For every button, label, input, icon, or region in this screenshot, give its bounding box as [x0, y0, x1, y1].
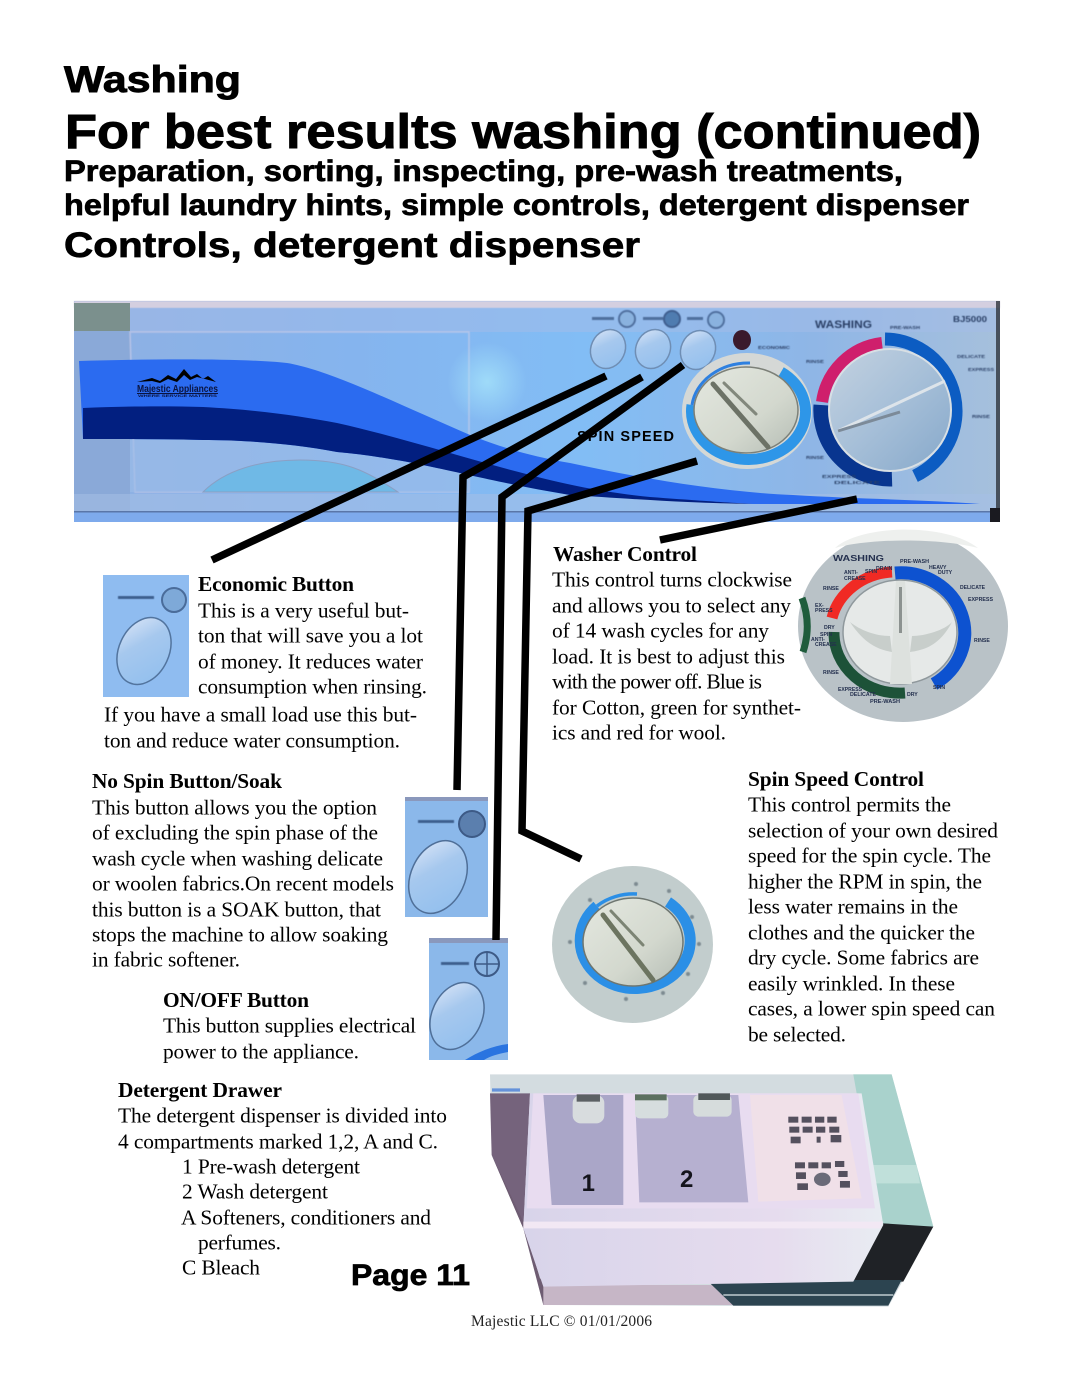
text: washer control: with the power off. Blue is [552, 670, 762, 694]
text: washer control: and allows you to select any [552, 594, 791, 618]
text: washer control [552, 542, 801, 745]
panel labels: RINSE [972, 414, 990, 419]
leader lines [212, 365, 857, 940]
photo: washing programme dial: HEAVY [929, 565, 947, 571]
text: detergent drawer: 4 compartments marked 1,2, A and C. [118, 1130, 438, 1154]
drawer body [523, 1093, 883, 1287]
logo: Majestic Appliances: Majestic Appliances [137, 383, 218, 395]
text: no spin button: in fabric softener. [92, 948, 240, 972]
photo: washing programme dial: ANTI- [844, 570, 858, 576]
photo: washing programme dial: EX- [815, 603, 824, 609]
logo: Majestic Appliances: WHERE SERVICE MATTERS [138, 393, 217, 398]
main heading: For best results washing (continued) [65, 106, 981, 159]
compartment 1 [543, 1095, 623, 1205]
photo: washing programme dial [798, 530, 1008, 722]
text: detergent drawer: Detergent Drawer [118, 1078, 282, 1102]
text: spin speed control: easily wrinkled. In these [748, 972, 955, 996]
thumbnail: no spin button [397, 797, 488, 923]
footer copyright: Majestic LLC © 01/01/2006 [471, 1313, 652, 1330]
panel labels [758, 314, 994, 485]
panel labels: DELICATE [834, 480, 880, 485]
compartment cap tops [573, 1095, 604, 1123]
text: economic button: of money. It reduces water [198, 650, 423, 674]
text: spin speed control [748, 767, 998, 1047]
text: no spin button: of excluding the spin phase of the [92, 821, 378, 845]
subheading line 1: Preparation, sorting, inspecting, pre-wash treatments, [64, 155, 903, 188]
panel labels: WASHING [815, 319, 872, 331]
photo: washing programme dial: PRESS [815, 608, 833, 614]
text: no spin button: this button is a SOAK button, that [92, 898, 381, 922]
text: spin speed control: Spin Speed Control [748, 767, 924, 791]
text: no spin button: stops the machine to allow soaking [92, 923, 388, 947]
subheading: controls, detergent dispenser: Controls, detergent dispenser [64, 226, 640, 265]
photo: spin speed dial [552, 866, 713, 1023]
navy swoosh [83, 406, 753, 504]
text: washer control: ics and red for wool. [552, 721, 726, 745]
logo: Majestic Appliances [137, 369, 218, 398]
text: spin speed control: cases, a lower spin speed can [748, 997, 995, 1021]
photo: washing programme dial: PRE-WASH [870, 699, 900, 705]
photo: washing programme dial: CREASE [844, 576, 866, 582]
panel labels: RINSE [806, 359, 824, 364]
text: no spin button: wash cycle when washing delicate [92, 847, 383, 871]
text: washer control: for Cotton, green for synthet- [552, 696, 801, 720]
text: no spin button [92, 769, 394, 972]
photo: washing programme dial: DELICATE [850, 692, 877, 698]
photo: washing programme dial: EXPRESS [968, 597, 994, 603]
text: on/off button [163, 988, 416, 1064]
panel labels: EXPRESS [822, 474, 856, 479]
text: washer control: Washer Control [553, 542, 697, 566]
photo: washing programme dial: RINSE [823, 670, 839, 676]
photo: washing programme dial: DELICATE [960, 585, 986, 591]
text: detergent drawer [118, 1078, 447, 1280]
panel icons and buttons [584, 311, 751, 375]
text: spin speed control: selection of your own desired [748, 819, 998, 843]
text: on/off button: This button supplies electrical [163, 1014, 416, 1038]
section title: Washing: Washing [64, 59, 241, 100]
text: economic button: This is a very useful but- [198, 599, 409, 623]
text: spin speed control: higher the RPM in spin, the [748, 870, 982, 894]
text: on/off button: power to the appliance. [163, 1040, 359, 1064]
blue swoosh [79, 359, 980, 504]
photo: detergent drawer: 2 [680, 1166, 693, 1193]
text: economic button: If you have a small load use this but- [104, 703, 417, 727]
photo: detergent drawer [490, 1074, 933, 1307]
text: spin speed control: speed for the spin cycle. The [748, 844, 991, 868]
text: detergent drawer: 2 Wash detergent [182, 1180, 328, 1204]
text: washer control: This control turns clockwise [552, 568, 792, 592]
compartment numbers: 1 [582, 1170, 595, 1197]
photo: washing programme dial: SPIN [933, 685, 945, 691]
title block [64, 59, 981, 265]
text: economic button: ton that will save you a lot [198, 624, 423, 648]
thumbnail: on/off button [420, 938, 508, 1060]
photo: washing programme dial: PRE-WASH [900, 559, 929, 565]
label: SPIN SPEED: SPIN SPEED [577, 429, 674, 445]
photo: washing programme dial: DRAIN [876, 566, 893, 572]
photo: washing programme dial: DUTY [938, 570, 953, 576]
photo: washing programme dial: SPIN [820, 632, 832, 638]
text: economic button: consumption when rinsing. [198, 675, 427, 699]
text: detergent drawer: perfumes. [198, 1231, 281, 1255]
photo: washing programme dial: WASHING [833, 553, 884, 563]
text: detergent drawer: C Bleach [182, 1256, 260, 1280]
softener grid [750, 1095, 862, 1202]
thumbnail: economic button [103, 575, 189, 697]
text: economic button [104, 572, 427, 753]
photo: washing programme dial: DRY [907, 692, 918, 698]
panel labels: PRE-WASH [890, 325, 920, 330]
photo: washing programme dial: DRY [824, 625, 835, 631]
panel labels: DELICATE [957, 354, 985, 359]
text: on/off button: ON/OFF Button [163, 988, 309, 1012]
text: no spin button: No Spin Button/Soak [92, 769, 282, 793]
photo: washing programme dial: SPIN [865, 569, 877, 575]
photo: washing programme dial: RINSE [823, 586, 839, 592]
text: spin speed control: This control permits the [748, 793, 951, 817]
text: spin speed control: be selected. [748, 1023, 846, 1047]
text: no spin button: or woolen fabrics.On recent models [92, 872, 394, 896]
spin speed dial on panel [682, 353, 812, 469]
photo: washing programme dial: EXPRESS [838, 687, 863, 693]
text: spin speed control: clothes and the quicker the [748, 921, 975, 945]
panel labels: EXPRESS [968, 367, 994, 372]
page number: Page 11 [351, 1259, 470, 1292]
panel labels: RINSE [806, 455, 824, 460]
text: detergent drawer: A Softeners, conditioners and [181, 1206, 431, 1230]
text: economic button: ton and reduce water consumption. [104, 729, 400, 753]
panel labels: ECONOMIC [758, 345, 791, 350]
text: detergent drawer: 1 Pre-wash detergent [182, 1155, 360, 1179]
text: washer control: load. It is best to adjust this [552, 645, 785, 669]
photo: washing programme dial: ANTI- [811, 637, 825, 643]
subheading line 2: helpful laundry hints, simple controls, detergent dispenser [64, 189, 970, 222]
wash programme dial on panel [821, 339, 956, 479]
panel: washer control panel photo [74, 301, 1000, 522]
text: spin speed control: less water remains in the [748, 895, 958, 919]
text: economic button: Economic Button [198, 572, 354, 596]
text: detergent drawer: The detergent dispenser is divided into [118, 1104, 447, 1128]
drawer handle recess [203, 460, 398, 492]
text: washer control: of 14 wash cycles for any [552, 619, 769, 643]
compartment 2 [635, 1095, 748, 1202]
panel labels: BJ5000 [953, 314, 987, 324]
photo: washing programme dial: RINSE [974, 638, 990, 644]
photo: washing programme dial: CREASE [815, 642, 837, 648]
text: no spin button: This button allows you the option [92, 796, 377, 820]
text: spin speed control: dry cycle. Some fabrics are [748, 946, 979, 970]
